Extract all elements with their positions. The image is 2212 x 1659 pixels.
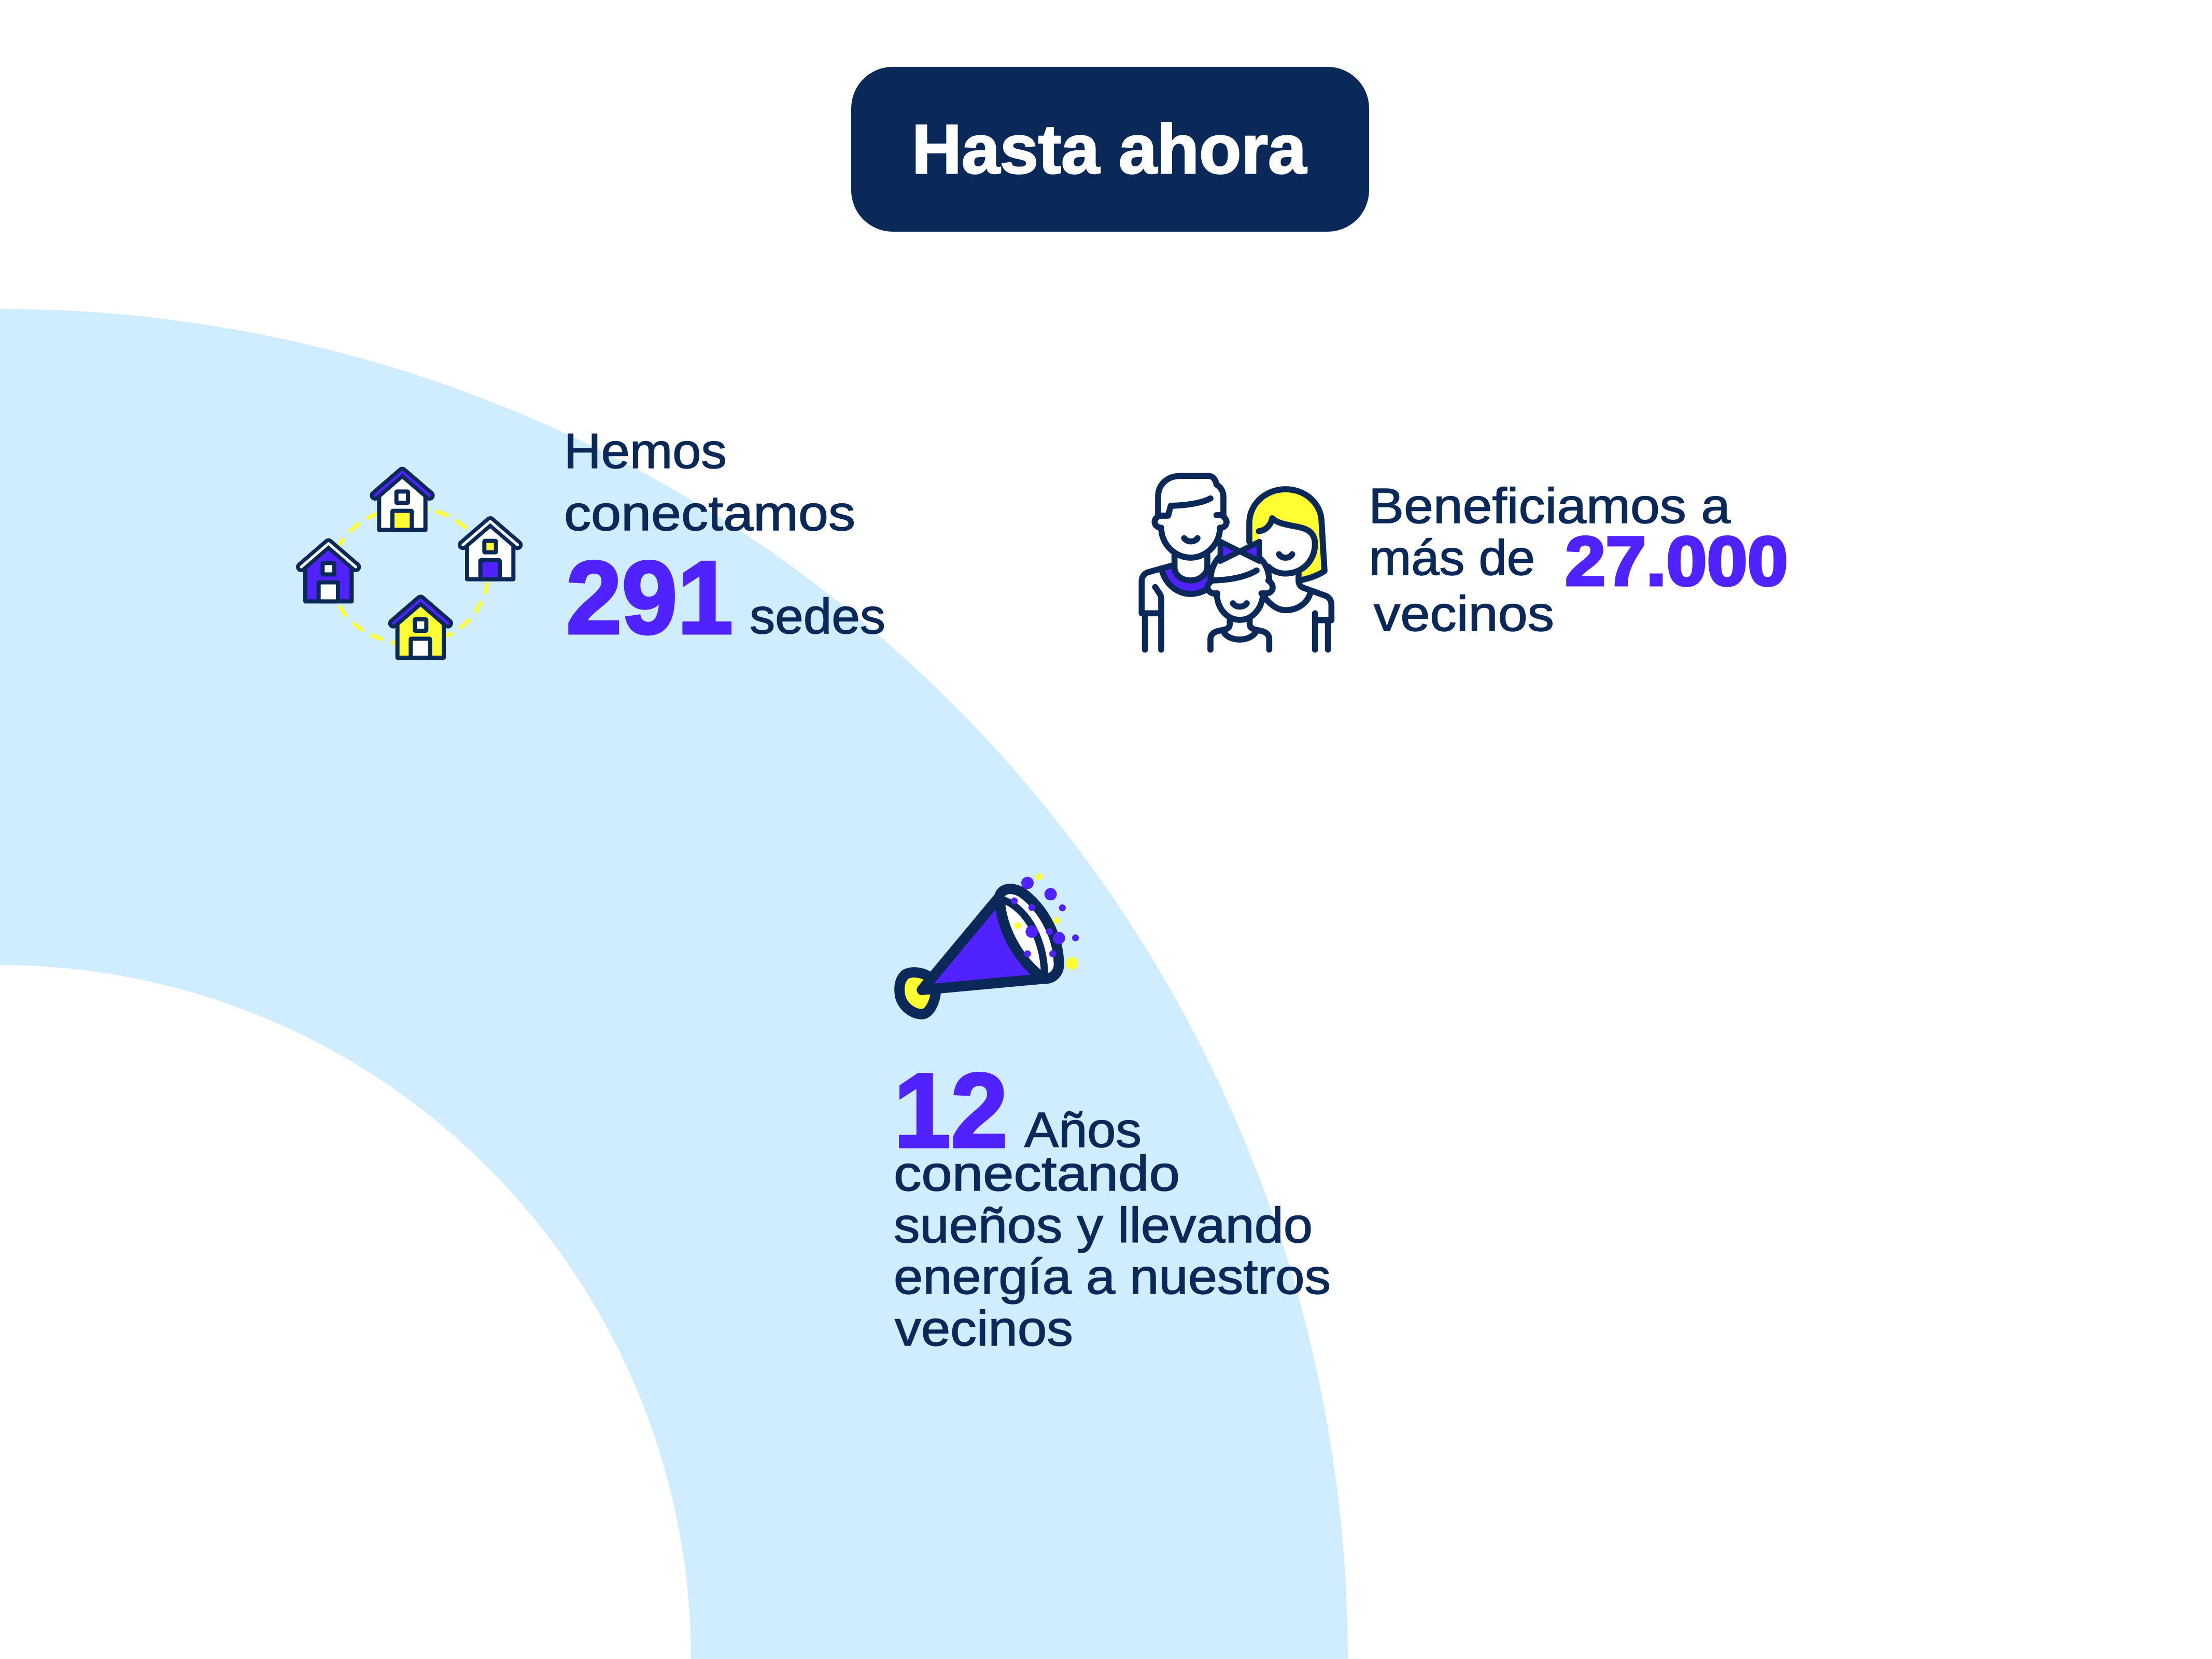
- number: 12: 12: [894, 1052, 1008, 1170]
- stat block: 12 años: [894, 873, 1331, 1356]
- popper cone: [922, 896, 1044, 990]
- title text: Hasta ahora: [912, 111, 1307, 188]
- hair bow: [1220, 542, 1259, 561]
- text: conectando sueños y llevando energía a nuestros vecinos: conectando: [894, 1146, 1180, 1201]
- stat block: 291 sedes: [301, 423, 885, 658]
- number: 291: 291: [566, 540, 733, 656]
- popper end cap: [899, 972, 936, 1014]
- text: Beneficiamos a más de: [1369, 478, 1731, 586]
- text: vecinos: vecinos: [1374, 586, 1554, 642]
- text: sedes: sedes: [750, 589, 885, 644]
- text: Hemos conectamos: [564, 423, 855, 541]
- dashed yellow connecting ring: [339, 507, 487, 643]
- confetti: [1011, 873, 1079, 970]
- text: Años: Años: [1024, 1102, 1142, 1158]
- man: [1142, 476, 1227, 649]
- popper mouth: [999, 889, 1059, 979]
- text: conectando sueños y llevando energía a nuestros vecinos: energía a nuestros: [894, 1249, 1331, 1304]
- text: conectando sueños y llevando energía a nuestros vecinos: vecinos: [895, 1301, 1073, 1356]
- text: Hemos conectamos: conectamos: [564, 486, 855, 541]
- title pill: [851, 67, 1369, 232]
- stat block: 27.000 vecinos: [1142, 476, 1788, 649]
- text: conectando sueños y llevando energía a nuestros vecinos: sueños y llevando: [894, 1198, 1313, 1253]
- house: left: [301, 544, 356, 601]
- woman: [1249, 489, 1331, 649]
- text: Beneficiamos a más de: Beneficiamos a: [1369, 478, 1731, 534]
- icon: party popper: [899, 873, 1079, 1014]
- house: bottom: [393, 600, 448, 658]
- text: conectando sueños y llevando energía a nuestros vecinos: [894, 1146, 1331, 1356]
- text: Beneficiamos a más de: más de: [1369, 530, 1535, 586]
- house: right: [463, 521, 517, 579]
- house: top: [375, 472, 430, 530]
- number: 27.000: 27.000: [1565, 523, 1788, 600]
- boy: [1207, 556, 1273, 649]
- text: Hemos conectamos: Hemos: [564, 423, 727, 479]
- background arc band: [0, 309, 1348, 1659]
- icon: family: [1142, 476, 1331, 649]
- icon: four connected houses: [301, 472, 517, 658]
